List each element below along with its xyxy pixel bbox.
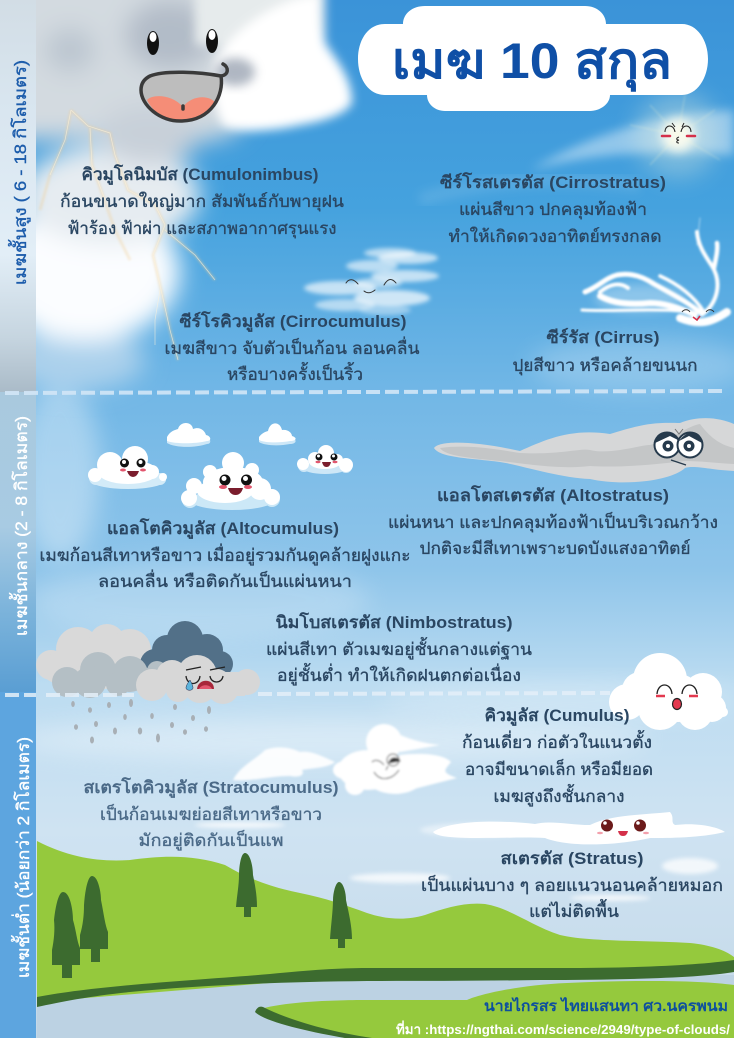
left strip: high clouds xyxy=(0,0,36,392)
lightning xyxy=(40,110,215,360)
cloud: cumulus xyxy=(609,653,728,730)
trees xyxy=(52,853,352,978)
cloud: stratocumulus xyxy=(233,724,457,795)
sun glow xyxy=(636,93,720,177)
text: cirrocumulus: ซีร์โรคิวมูลัส (Cirrocumulus) xyxy=(180,311,406,333)
tree 1 xyxy=(52,892,80,978)
dark cloud xyxy=(140,621,233,680)
dark bank xyxy=(37,960,734,1007)
title text: เมฆ 10 สกุล xyxy=(392,33,672,92)
cloud: cirrocumulus xyxy=(304,248,439,315)
landscape xyxy=(37,841,734,1038)
text: cumulus: ก้อนเดี่ยว ก่อตัวในแนวตั้ง xyxy=(462,730,652,752)
text: cumulus: อาจมีขนาดเล็ก หรือมียอด xyxy=(465,758,653,779)
cloud: altocumulus group xyxy=(88,423,353,510)
water xyxy=(37,975,734,1038)
text: cumulus xyxy=(462,706,653,807)
face xyxy=(682,310,714,320)
small cloud 2 xyxy=(259,423,296,445)
text: cumulonimbus: ฟ้าร้อง ฟ้าผ่า และสภาพอากาศรุนแรง xyxy=(68,219,336,239)
text: stratus: เป็นแผ่นบาง ๆ ลอยแนวนอนคล้ายหมอก xyxy=(421,874,723,895)
cloud centre xyxy=(181,452,280,510)
lower green xyxy=(258,981,734,1038)
rain drops xyxy=(71,699,211,744)
face xyxy=(372,754,400,779)
credit: author: นายไกรสร ไทยแสนทา ศว.นครพนม xyxy=(484,996,728,1015)
credit: source: ที่มา :https://ngthai.com/science/2949/type-of-clouds/ xyxy=(396,1020,730,1037)
cumulonimbus face xyxy=(141,29,227,121)
text: nimbostratus: นิมโบสเตรตัส (Nimbostratus) xyxy=(276,612,512,632)
cloud: altostratus xyxy=(434,418,734,482)
text: altostratus xyxy=(388,485,718,558)
sad face xyxy=(186,667,225,690)
text: nimbostratus: แผ่นสีเทา ตัวเมฆอยู่ชั้นกลางแต่ฐาน xyxy=(266,637,532,660)
face xyxy=(120,458,146,477)
cloud: cirrus xyxy=(582,218,727,322)
text: altocumulus: เมฆก้อนสีเทาหรือขาว เมื่ออยู่รวมกันดูคล้ายฝูงแกะ xyxy=(40,543,410,566)
tree 4 xyxy=(330,882,352,948)
side label: low clouds: เมฆชั้นต่ำ (น้อยกว่า 2 กิโลเมตร) xyxy=(11,737,33,978)
tree 2 xyxy=(80,876,108,962)
face xyxy=(316,454,338,467)
side label: high clouds: เมฆชั้นสูง ( 6 - 18 กิโลเมตร) xyxy=(8,60,31,285)
cloud: cumulonimbus xyxy=(0,0,352,390)
sky wisps xyxy=(10,337,734,762)
text: cirrocumulus: เมฆสีขาว จับตัวเป็นก้อน ลอนคลื่น xyxy=(164,336,420,358)
text: stratocumulus: เป็นก้อนเมฆย่อยสีเทาหรือขาว xyxy=(100,803,322,824)
text: cirrus: ปุยสีขาว หรือคล้ายขนนก xyxy=(512,356,698,376)
text: nimbostratus xyxy=(266,612,532,686)
cloud: cirrostratus with sun xyxy=(420,93,734,200)
text: cirrostratus: ทำให้เกิดดวงอาทิตย์ทรงกลด xyxy=(448,226,662,246)
face xyxy=(597,820,649,836)
cloud: nimbostratus group xyxy=(36,621,260,704)
text: altostratus: ปกติจะมีสีเทาเพราะบดบังแสงอาทิตย์ xyxy=(420,539,690,558)
text: cirrostratus xyxy=(440,172,666,246)
text: altostratus: แผ่นหนา และปกคลุมท้องฟ้าเป็นบริเวณกว้าง xyxy=(388,511,718,533)
text: cirrus: ซีร์รัส (Cirrus) xyxy=(546,327,660,347)
text: cirrostratus: ซีร์โรสเตรตัส (Cirrostratus) xyxy=(440,172,666,192)
face xyxy=(346,279,396,293)
cloud left xyxy=(88,446,167,489)
text: cumulonimbus xyxy=(60,164,344,239)
sun face xyxy=(662,123,695,143)
text: cumulonimbus: คิวมูโลนิมบัส (Cumulonimbus) xyxy=(82,164,318,186)
text: stratus xyxy=(421,849,723,921)
text: cirrocumulus xyxy=(164,311,420,384)
left strip: low clouds xyxy=(0,692,36,1038)
left strip: middle clouds xyxy=(0,392,36,692)
upper hill xyxy=(37,841,734,1002)
face xyxy=(656,685,698,710)
text: stratocumulus: สเตรโตคิวมูลัส (Stratocumulus) xyxy=(84,777,338,799)
wisps over land xyxy=(195,822,718,901)
small cloud 1 xyxy=(167,423,210,447)
cloud right xyxy=(297,445,353,474)
text: altocumulus: แอลโตคิวมูลัส (Altocumulus) xyxy=(107,518,339,540)
cloud: stratus xyxy=(420,812,725,844)
text: cirrostratus: แผ่นสีขาว ปกคลุมท้องฟ้า xyxy=(459,200,647,220)
eyes xyxy=(147,29,218,55)
text: stratus: สเตรตัส (Stratus) xyxy=(500,849,644,868)
text: cumulus: เมฆสูงถึงชั้นกลาง xyxy=(494,784,624,807)
title badge xyxy=(358,6,708,111)
dashed divider: lower xyxy=(5,693,610,695)
text: stratocumulus: มักอยู่ติดกันเป็นแพ xyxy=(138,829,284,851)
text: cumulus: คิวมูลัส (Cumulus) xyxy=(484,706,630,727)
mouth xyxy=(141,64,227,121)
face xyxy=(654,429,702,465)
face xyxy=(219,474,252,495)
grey-blue cloud xyxy=(52,652,167,698)
tree 3 xyxy=(236,853,257,917)
side label: middle clouds: เมฆชั้นกลาง (2 - 8 กิโลเมตร) xyxy=(9,416,31,636)
text: stratocumulus xyxy=(84,777,338,851)
dashed divider: upper xyxy=(5,391,727,393)
text: altocumulus xyxy=(40,518,410,591)
text: stratus: แต่ไม่ติดพื้น xyxy=(529,899,619,921)
front cloud xyxy=(136,655,260,704)
back pale cloud xyxy=(36,624,151,690)
text: cumulonimbus: ก้อนขนาดใหญ่มาก สัมพันธ์กับพายุฝน xyxy=(60,191,344,212)
text: cirrocumulus: หรือบางครั้งเป็นริ้ว xyxy=(227,362,363,384)
text: altostratus: แอลโตสเตรตัส (Altostratus) xyxy=(437,485,669,505)
text: altocumulus: ลอนคลื่น หรือติดกันเป็นแผ่นหนา xyxy=(98,569,352,591)
text: nimbostratus: อยู่ชั้นต่ำ ทำให้เกิดฝนตกต่อเนื่อง xyxy=(277,663,521,686)
lower rim xyxy=(255,1007,372,1038)
text: cirrus xyxy=(512,327,698,376)
